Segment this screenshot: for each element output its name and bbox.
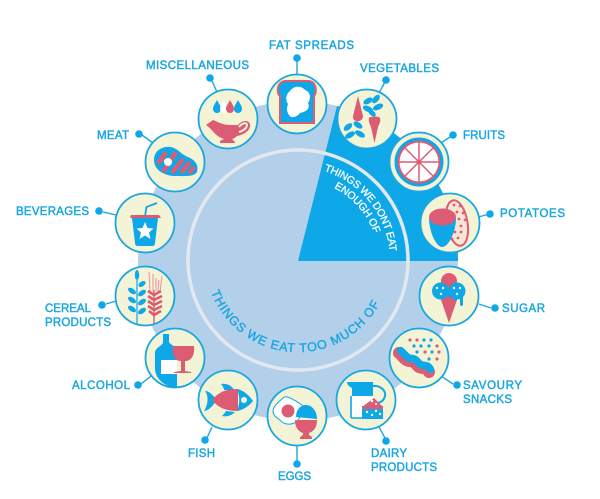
item: dairy products bbox=[336, 370, 437, 474]
item: vegetables bbox=[338, 63, 439, 148]
item: fruits: FRUITS bbox=[463, 130, 505, 142]
item: sugar bbox=[420, 266, 545, 326]
curved label: things we eat too much of: THINGS WE EAT TOO MUCH OF bbox=[212, 288, 378, 352]
item: beverages bbox=[16, 194, 174, 252]
inner ring bbox=[188, 150, 408, 370]
item: potatoes: POTATOES bbox=[500, 208, 565, 220]
item: dairy products: PRODUCTS bbox=[371, 462, 437, 474]
item: alcohol bbox=[72, 328, 204, 392]
curved label: things we don't eat enough of: THINGS WE DONT EAT bbox=[326, 164, 397, 251]
item: fat spreads: FAT SPREADS bbox=[269, 40, 354, 52]
item: beverages: BEVERAGES bbox=[16, 206, 89, 218]
item: cereal products bbox=[45, 266, 174, 329]
item: fish bbox=[188, 370, 258, 460]
item: meat: MEAT bbox=[97, 130, 129, 142]
item: dairy products: DAIRY bbox=[371, 448, 407, 460]
item: fat spreads bbox=[268, 40, 354, 134]
item: miscellaneous: MISCELLANEOUS bbox=[146, 60, 249, 72]
item: eggs bbox=[268, 386, 326, 483]
item: cereal products: CEREAL bbox=[45, 303, 92, 315]
item: fruits bbox=[390, 130, 505, 192]
item: sugar: SUGAR bbox=[502, 303, 545, 315]
pie background circle bbox=[138, 101, 458, 421]
item: potatoes bbox=[420, 194, 565, 252]
item: vegetables: VEGETABLES bbox=[360, 63, 439, 75]
item: savoury snacks: SAVOURY bbox=[463, 380, 522, 392]
item: eggs: EGGS bbox=[278, 471, 311, 483]
item: fish: FISH bbox=[188, 448, 215, 460]
item: savoury snacks: SNACKS bbox=[463, 394, 512, 406]
item: meat bbox=[97, 130, 204, 192]
item: cereal products: PRODUCTS bbox=[45, 317, 111, 329]
blue wedge: things we don't eat enough of bbox=[298, 106, 458, 261]
item: savoury snacks bbox=[390, 328, 522, 406]
item: alcohol: ALCOHOL bbox=[72, 380, 131, 392]
item: miscellaneous bbox=[146, 60, 258, 148]
curved label: things we don't eat enough of: ENOUGH OF bbox=[334, 182, 381, 232]
